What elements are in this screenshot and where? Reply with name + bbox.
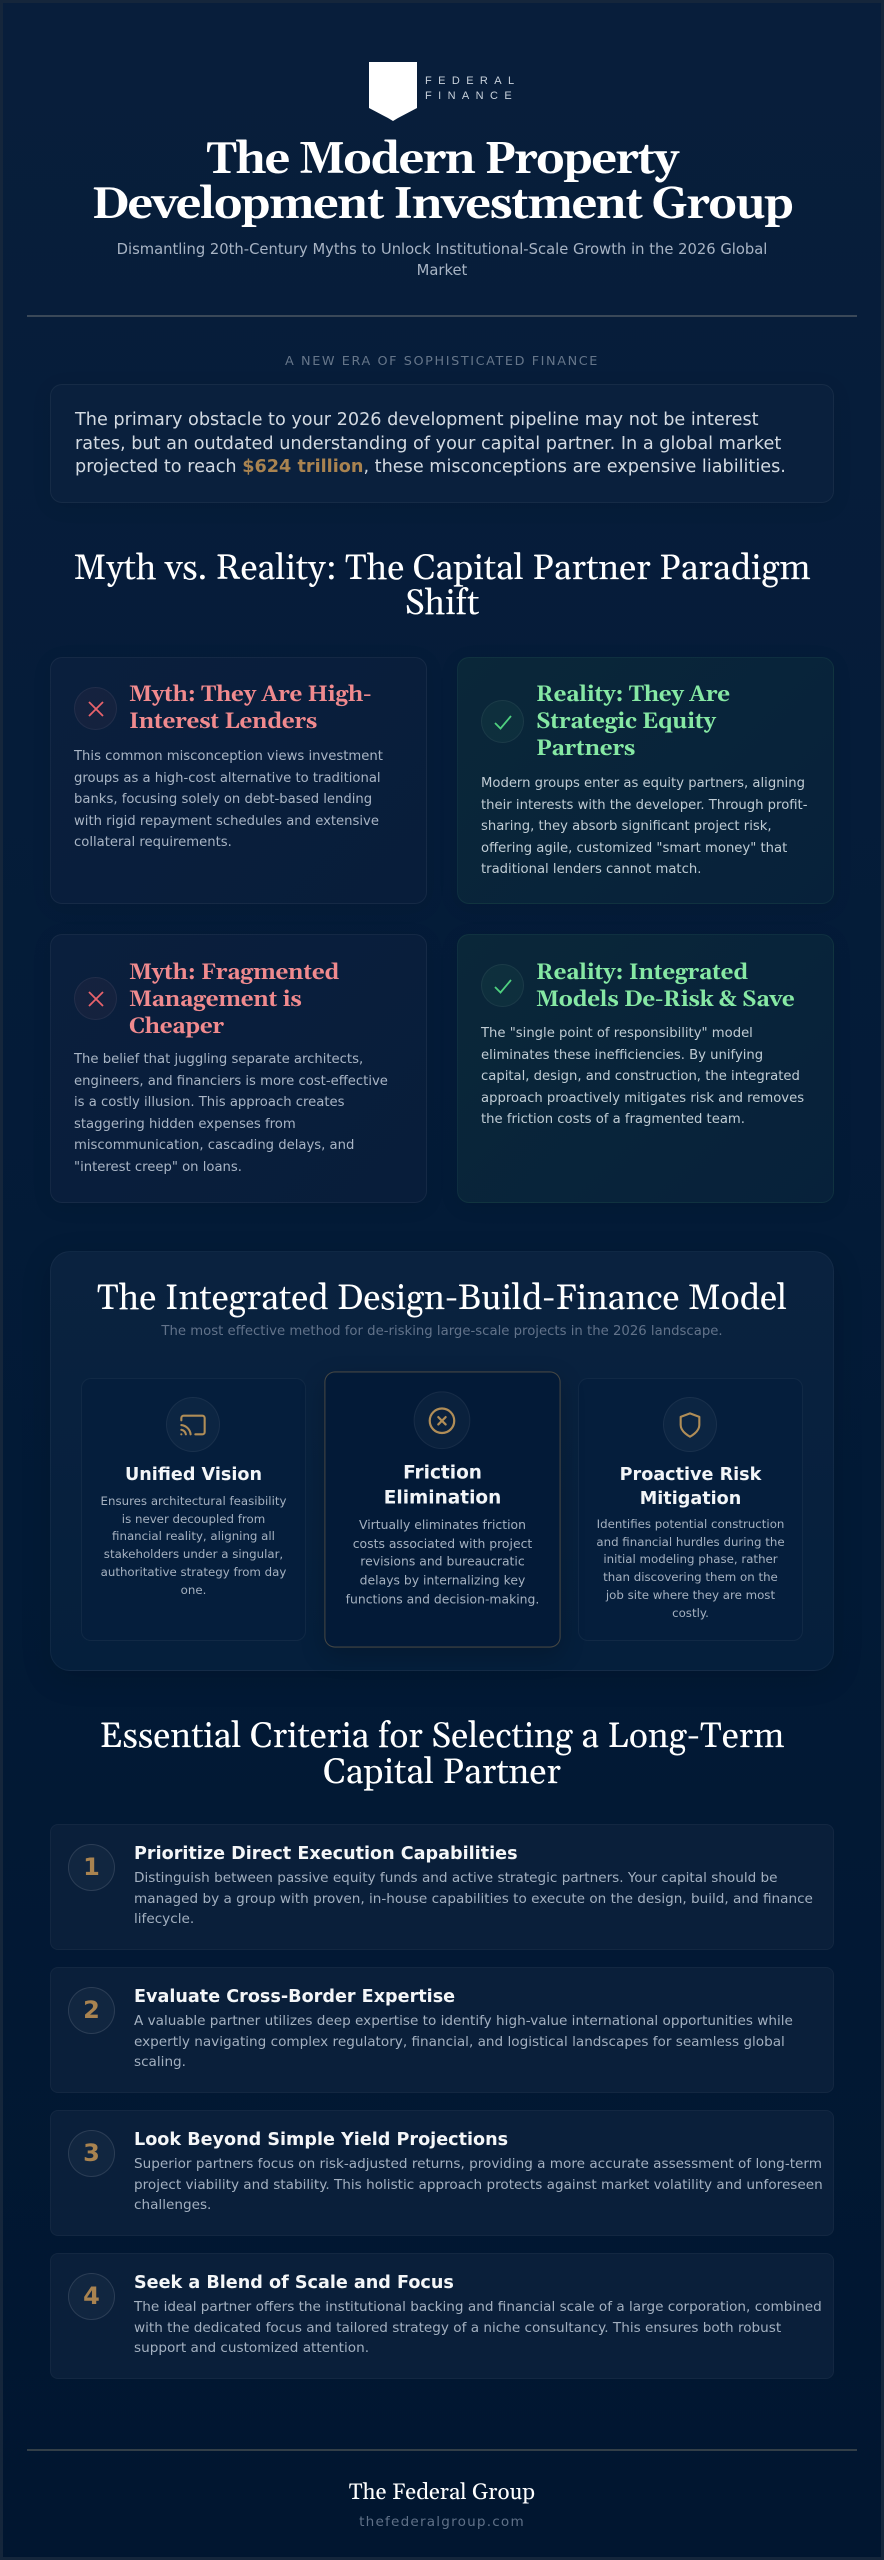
myth 1 text	[74, 749, 383, 850]
reality 1 heading: Reality: They Are	[536, 680, 730, 709]
unified vision text: financial reality, aligning all	[112, 1529, 275, 1543]
criterion 3 text: Superior partners focus on risk-adjusted returns, providing a more accurate assessment of long-term	[134, 2156, 822, 2172]
myth 2 text: "interest creep" on loans.	[74, 1160, 242, 1175]
myth 2 text	[74, 1052, 388, 1175]
criterion 4 text: The ideal partner offers the institutional backing and financial scale of a large corporation, combined	[134, 2299, 822, 2315]
myth 1 heading: Myth: They Are High-	[129, 680, 371, 709]
subtitle	[117, 241, 767, 279]
friction text	[345, 1517, 539, 1606]
friction title: Friction	[403, 1463, 481, 1484]
proactive risk text: than discovering them on the	[603, 1570, 778, 1584]
proactive risk text: Identifies potential construction	[597, 1517, 784, 1531]
unified vision title: Unified Vision	[125, 1465, 262, 1485]
card: proactive risk mitigation	[578, 1378, 803, 1641]
criterion 1 text: Distinguish between passive equity funds and active strategic partners. Your capital should be	[134, 1870, 778, 1886]
number 3	[68, 2130, 115, 2177]
reality 1 heading: Partners	[536, 734, 635, 763]
reality 2 text: the friction costs of a fragmented team.	[481, 1112, 745, 1127]
criterion 3 text: challenges.	[134, 2197, 211, 2213]
criterion 2 text	[134, 2013, 793, 2070]
friction title	[383, 1463, 501, 1508]
proactive risk title	[620, 1465, 762, 1508]
myth 1 text: collateral requirements.	[74, 835, 232, 850]
heading: essential criteria: Capital Partner	[323, 1751, 561, 1796]
myth 1 text: This common misconception views investment	[74, 749, 383, 764]
criterion 2 text: A valuable partner utilizes deep expertise to identify high-value international opportunities while	[134, 2013, 793, 2029]
number 1	[68, 1844, 115, 1891]
criterion 1 text: lifecycle.	[134, 1911, 194, 1927]
proactive risk text: costly.	[672, 1606, 709, 1620]
criterion 3 title: Look Beyond Simple Yield Projections	[134, 2130, 508, 2150]
criterion 4 text: with the dedicated focus and tailored strategy of a niche consultancy. This ensures both robust	[134, 2320, 781, 2336]
subtitle: Market	[417, 262, 467, 279]
number 4: 4	[83, 2282, 100, 2310]
myth 2 text: staggering hidden expenses from	[74, 1117, 296, 1132]
criterion 4 title: Seek a Blend of Scale and Focus	[134, 2273, 454, 2293]
intro text: The primary obstacle to your 2026 development pipeline may not be interest	[75, 410, 759, 430]
criterion 2 text: scaling.	[134, 2054, 186, 2070]
myth 2 heading: Management is	[129, 985, 301, 1014]
icon: red cross	[74, 977, 117, 1020]
reality 2 text: approach proactively mitigates risk and removes	[481, 1091, 804, 1106]
card: unified vision	[81, 1378, 306, 1641]
title: The Modern Property	[206, 132, 678, 189]
overline: A NEW ERA OF SOPHISTICATED FINANCE	[285, 354, 599, 369]
logo: Federal Finance	[369, 62, 521, 121]
criterion 4 text: support and customized attention.	[134, 2340, 369, 2356]
criterion 2 title: Evaluate Cross-Border Expertise	[134, 1987, 455, 2007]
reality 2 text	[480, 1026, 804, 1127]
logo wordmark: FEDERAL	[425, 75, 521, 87]
panel: reality 2	[457, 934, 834, 1203]
reality 1 text: sharing, they absorb significant project risk,	[481, 819, 772, 834]
friction text: revisions and bureaucratic	[360, 1555, 524, 1569]
criterion 1 text	[134, 1870, 813, 1927]
reality 1 text	[481, 776, 808, 877]
unified vision text: stakeholders under a singular,	[104, 1547, 283, 1561]
heading: myth vs reality: Myth vs. Reality: The Capital Partner Paradigm	[74, 547, 810, 592]
criterion 2 text: expertly navigating complex regulatory, financial, and logistical landscapes for seamless global	[134, 2034, 785, 2050]
myth 1 heading	[129, 680, 371, 736]
reality 1 text: offering agile, customized "smart money" that	[481, 841, 787, 856]
friction text: costs associated with project	[352, 1536, 532, 1551]
panel: reality 1	[457, 657, 834, 904]
unified vision text: is never decoupled from	[122, 1512, 265, 1526]
panel: intro	[50, 384, 834, 503]
myth 1 heading: Interest Lenders	[129, 707, 317, 736]
myth 2 text: engineers, and financiers is more cost-effective	[74, 1074, 388, 1089]
panel: myth 2	[50, 934, 427, 1203]
reality 2 heading: Models De-Risk & Save	[536, 985, 794, 1014]
reality 1 heading: Strategic Equity	[536, 707, 716, 736]
proactive risk text: job site where they are most	[606, 1588, 775, 1602]
number 3: 3	[83, 2139, 100, 2167]
icon: white shield	[369, 62, 417, 121]
icon: red cross	[74, 687, 117, 730]
proactive risk text: and financial hurdles during the	[596, 1535, 785, 1549]
footer url: thefederalgroup.com	[359, 2514, 525, 2530]
reality 2 text: capital, design, and construction, the integrated	[481, 1069, 800, 1084]
card: friction elimination (featured)	[324, 1371, 560, 1648]
myth 2 heading	[129, 958, 339, 1041]
heading: essential criteria: Essential Criteria for Selecting a Long-Term	[100, 1715, 784, 1760]
intro text: rates, but an outdated understanding of your capital partner. In a global market	[75, 434, 781, 454]
criterion 3 text: project viability and stability. This holistic approach protects against market volatility and unforeseen	[134, 2177, 823, 2193]
myth 1 text: banks, focusing solely on debt-based lending	[74, 792, 372, 807]
icon: cast	[166, 1397, 220, 1452]
myth 2 heading: Myth: Fragmented	[129, 958, 339, 987]
heading: myth vs reality	[74, 547, 810, 627]
reality 2 heading: Reality: Integrated	[536, 958, 748, 987]
myth 1 text: groups as a high-cost alternative to traditional	[74, 771, 381, 786]
reality 2 text: The "single point of responsibility" model	[481, 1026, 753, 1041]
myth 2 text: The belief that juggling separate architects,	[74, 1052, 363, 1067]
unified vision text: authoritative strategy from day	[101, 1565, 286, 1579]
number 2	[68, 1987, 115, 2034]
number 1: 1	[83, 1853, 100, 1881]
reality 2 text: eliminates these inefficiencies. By unifying	[481, 1048, 763, 1063]
criterion 4	[50, 2253, 834, 2379]
reality 1 heading	[536, 680, 730, 763]
myth 1 text: with rigid repayment schedules and extensive	[74, 814, 379, 829]
subtitle: Dismantling 20th-Century Myths to Unlock Institutional-Scale Growth in the 2026 Global	[117, 241, 767, 258]
unified vision text: one.	[181, 1583, 206, 1597]
reality 1 text: their interests with the developer. Through profit-	[481, 798, 808, 813]
criterion 3	[50, 2110, 834, 2236]
criterion 1 text: managed by a group with proven, in-house capabilities to execute on the design, build, and finance	[134, 1891, 813, 1907]
reality 1 text: Modern groups enter as equity partners, aligning	[481, 776, 805, 791]
criterion 4 text	[134, 2299, 822, 2356]
icon: x circle	[413, 1391, 470, 1449]
unified vision text: Ensures architectural feasibility	[101, 1494, 286, 1508]
proactive risk title: Mitigation	[640, 1488, 741, 1508]
friction title: Elimination	[383, 1487, 501, 1508]
reality 1 text: traditional lenders cannot match.	[481, 862, 701, 877]
unified vision text	[101, 1494, 286, 1597]
panel: integrated model	[50, 1251, 834, 1671]
friction text: functions and decision-making.	[345, 1592, 539, 1606]
number 2: 2	[83, 1996, 100, 2024]
icon: green check	[481, 964, 524, 1007]
friction text: delays by internalizing key	[359, 1573, 525, 1588]
criterion 1 title: Prioritize Direct Execution Capabilities	[134, 1844, 518, 1864]
friction text: Virtually eliminates friction	[359, 1517, 525, 1532]
integrated model subtitle: The most effective method for de-risking large-scale projects in the 2026 landscape.	[161, 1324, 723, 1339]
intro text: projected to reach $624 trillion, these misconceptions are expensive liabilities.	[75, 457, 786, 477]
reality 2 heading	[536, 958, 794, 1014]
title	[92, 132, 792, 234]
title: Development Investment Group	[92, 177, 792, 234]
proactive risk text	[596, 1517, 785, 1620]
criterion 3 text	[134, 2156, 823, 2213]
criterion 2	[50, 1967, 834, 2093]
logo wordmark	[425, 75, 521, 102]
footer brand: The Federal Group	[349, 2478, 535, 2507]
logo wordmark: FINANCE	[425, 90, 518, 102]
icon: green check	[481, 700, 524, 743]
heading: integrated model: The Integrated Design-Build-Finance Model	[97, 1277, 787, 1322]
myth 2 text: is a costly illusion. This approach creates	[74, 1095, 344, 1110]
myth 2 text: miscommunication, cascading delays, and	[74, 1138, 354, 1153]
panel: myth 1	[50, 657, 427, 904]
proactive risk title: Proactive Risk	[620, 1465, 761, 1485]
number 4	[68, 2273, 115, 2320]
icon: shield	[663, 1397, 717, 1452]
myth 2 heading: Cheaper	[129, 1012, 224, 1041]
heading: essential criteria	[100, 1715, 784, 1796]
criterion 1	[50, 1824, 834, 1950]
intro text	[74, 410, 786, 477]
proactive risk text: initial modeling phase, rather	[603, 1552, 778, 1566]
heading: myth vs reality: Shift	[405, 582, 479, 627]
